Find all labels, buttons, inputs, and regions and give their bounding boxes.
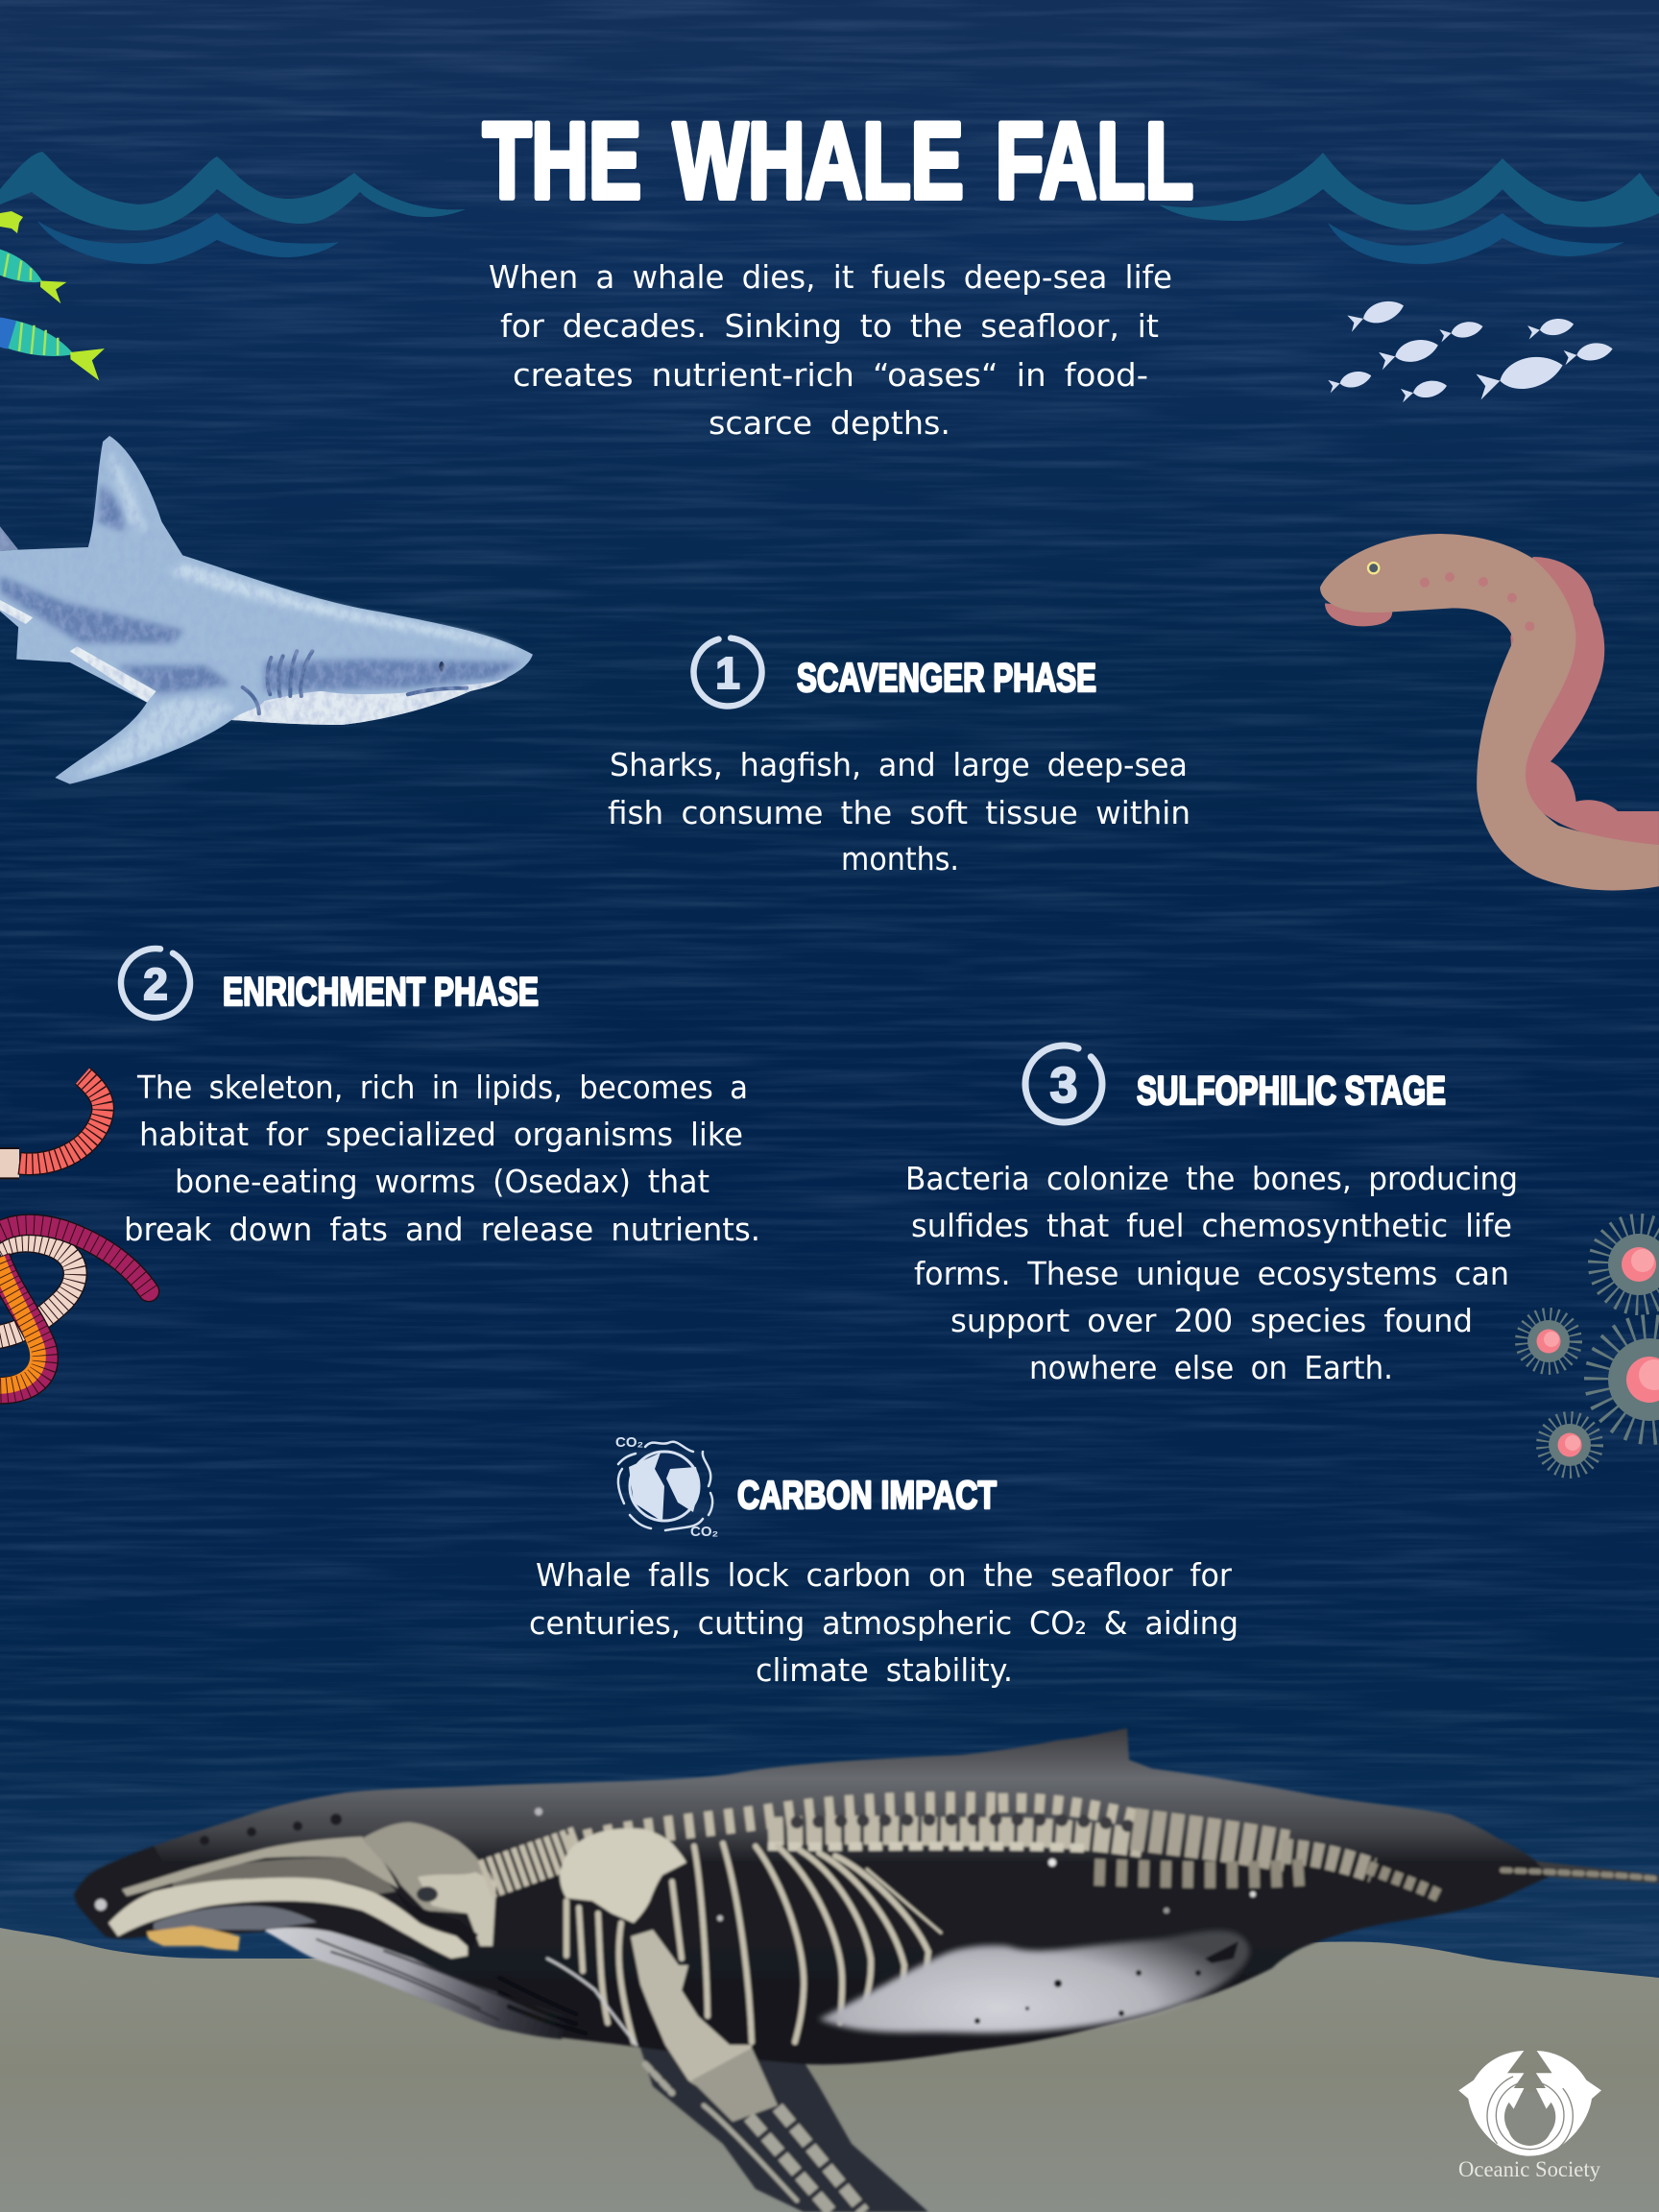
body text — [124, 1069, 760, 1248]
body text: forms. These unique ecosystems can — [914, 1255, 1509, 1292]
waves: upper right — [1159, 153, 1659, 264]
whale head spots — [74, 1814, 342, 1936]
body text: nowhere else on Earth. — [1029, 1349, 1393, 1386]
whale belly spots — [535, 1808, 1256, 2024]
icon: globe with CO2: CO₂ — [690, 1524, 718, 1540]
icon: number 1: 1 — [715, 648, 740, 698]
icon: number 3: 3 — [1050, 1058, 1077, 1114]
body text — [529, 1556, 1238, 1689]
body text: climate stability. — [756, 1651, 1013, 1689]
whale skull — [108, 1822, 496, 1959]
waves: upper left — [0, 152, 466, 264]
icon: moray eel — [1320, 534, 1659, 890]
icon: school of white fish right — [1327, 296, 1614, 403]
body text — [608, 746, 1190, 878]
body text: The skeleton, rich in lipids, becomes a — [136, 1069, 748, 1106]
body text: centuries, cutting atmospheric CO₂ & aiding — [529, 1604, 1238, 1642]
body text: Sharks, hagfish, and large deep-sea — [610, 746, 1188, 783]
microbe — [1599, 1224, 1659, 1305]
body text: bone-eating worms (Osedax) that — [175, 1163, 709, 1200]
whale spine — [485, 1803, 1659, 1896]
body text: fish consume the soft tissue within — [608, 794, 1190, 831]
title: THE WHALE FALL — [483, 101, 1193, 221]
whale belly patch — [819, 1931, 1249, 2032]
whale scapula and arm bones — [547, 1828, 864, 2212]
whale skeleton illustration — [74, 1728, 1659, 2212]
worm: pale loop — [0, 1240, 75, 1337]
whale tail — [1535, 1861, 1659, 1884]
icon: globe with CO2 — [615, 1434, 718, 1540]
intro text: for decades. Sinking to the seafloor, it — [500, 307, 1159, 345]
whale throat grooves — [266, 1928, 586, 2039]
worm: orange and magenta — [0, 1258, 45, 1390]
whale ribs — [566, 1843, 941, 2042]
body text: sulfides that fuel chemosynthetic life — [911, 1207, 1512, 1244]
heading: SCAVENGER PHASE — [797, 655, 1096, 700]
panel: carbon impact — [529, 1434, 1238, 1689]
body text: Bacteria colonize the bones, producing — [905, 1160, 1518, 1197]
icon: shark — [0, 436, 533, 784]
body text: break down fats and release nutrients. — [124, 1211, 760, 1248]
icon: segmented worms — [0, 1076, 149, 1390]
body text: months. — [841, 840, 959, 878]
icon: striped fish left — [0, 211, 108, 381]
body text: habitat for specialized organisms like — [139, 1116, 743, 1153]
seafloor — [0, 1928, 1659, 2212]
panel: scavenger phase — [608, 636, 1190, 878]
heading: CARBON IMPACT — [737, 1473, 997, 1517]
whale baleen — [147, 1906, 317, 1951]
icon: globe with CO2: CO₂ — [615, 1434, 643, 1451]
intro text: scarce depths. — [709, 404, 950, 442]
whale body — [74, 1728, 1549, 2064]
intro text — [489, 258, 1172, 442]
panel: enrichment phase — [108, 936, 760, 1248]
icon: number 1 — [691, 636, 764, 709]
icon: number 2: 2 — [143, 959, 168, 1009]
icon: microbes cluster — [1522, 1224, 1659, 1472]
panel: sulfophilic stage — [905, 1029, 1518, 1386]
heading: ENRICHMENT PHASE — [223, 969, 539, 1014]
icon: number 3 — [1009, 1029, 1118, 1139]
worm: magenta — [0, 1225, 149, 1291]
microbe — [1522, 1314, 1575, 1368]
microbe — [1543, 1418, 1597, 1472]
microbe — [1598, 1328, 1659, 1431]
worm: salmon — [0, 1076, 103, 1164]
body text: Whale falls lock carbon on the seafloor for — [536, 1556, 1232, 1594]
icon: number 2 — [108, 936, 203, 1030]
whale flipper — [640, 2023, 928, 2212]
logo: oceanic society — [1458, 2051, 1601, 2181]
intro text: When a whale dies, it fuels deep-sea life — [489, 258, 1172, 296]
logo wordmark: Oceanic Society — [1458, 2157, 1600, 2181]
intro text: creates nutrient-rich “oases“ in food- — [513, 356, 1148, 394]
logo dolphins — [1458, 2051, 1601, 2176]
heading: SULFOPHILIC STAGE — [1137, 1068, 1446, 1113]
body text: support over 200 species found — [950, 1302, 1473, 1339]
body text — [905, 1160, 1518, 1386]
